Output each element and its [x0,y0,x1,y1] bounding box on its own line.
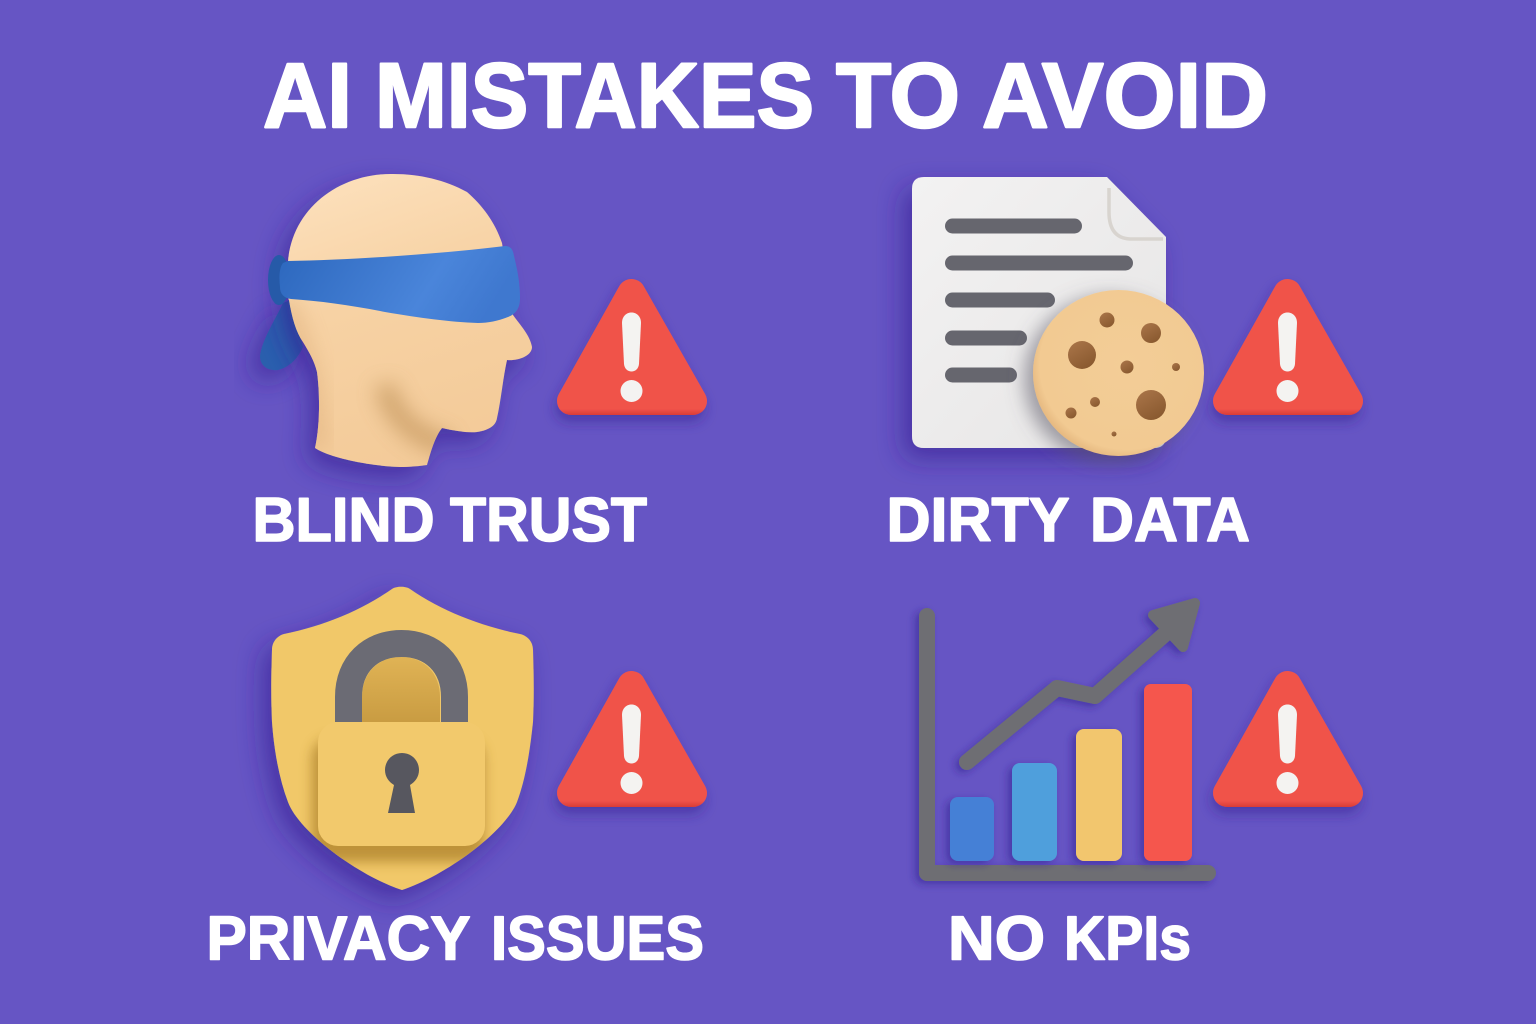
icon: rising bar chart [927,603,1208,873]
title: AVOID [982,45,1268,147]
padlock shackle [348,644,454,722]
trend arrow [967,603,1195,762]
label: privacy issues [206,904,704,974]
cookie [1033,290,1204,456]
shield [271,587,534,890]
label: privacy issues: ISSUES [491,904,704,974]
padlock shadow on shield [312,738,484,862]
padlock body [318,722,485,846]
cheek shading [286,300,450,450]
title: MISTAKES [375,45,814,147]
document [912,177,1166,448]
document fold [1109,188,1163,239]
label: blind trust [252,486,647,555]
label: dirty data: DIRTY [886,486,1070,555]
label: no kpis: NO [948,904,1045,974]
keyhole [385,753,419,813]
label: privacy issues: PRIVACY [206,904,470,974]
chart axes [927,616,1208,873]
icon: document with cookie [912,177,1204,456]
icon: warning triangle [1227,293,1349,402]
head [288,174,532,467]
blindfold band [279,246,520,323]
panel: privacy issues [206,587,704,974]
icon: warning triangle [571,293,693,402]
icon: warning triangle [1227,685,1349,794]
panel: dirty data [886,177,1349,555]
title [263,45,1268,147]
label: no kpis: KPIs [1064,904,1191,974]
label: dirty data: DATA [1090,486,1250,555]
title: TO [836,45,960,147]
bars [950,684,1192,861]
icon: blindfolded head [260,174,532,467]
icon: shield with padlock [271,587,534,890]
label: no kpis [948,904,1191,974]
title: AI [263,45,352,147]
panel: blind trust [252,174,693,555]
blindfold tail [260,300,303,370]
label: dirty data [886,486,1250,555]
label: blind trust: TRUST [450,486,647,555]
document text lines [945,218,1133,382]
panel: no kpis [927,603,1349,974]
icon: warning triangle [571,685,693,794]
shield inner shading [362,657,440,722]
label: blind trust: BLIND [252,486,434,555]
blindfold knot [268,255,290,305]
